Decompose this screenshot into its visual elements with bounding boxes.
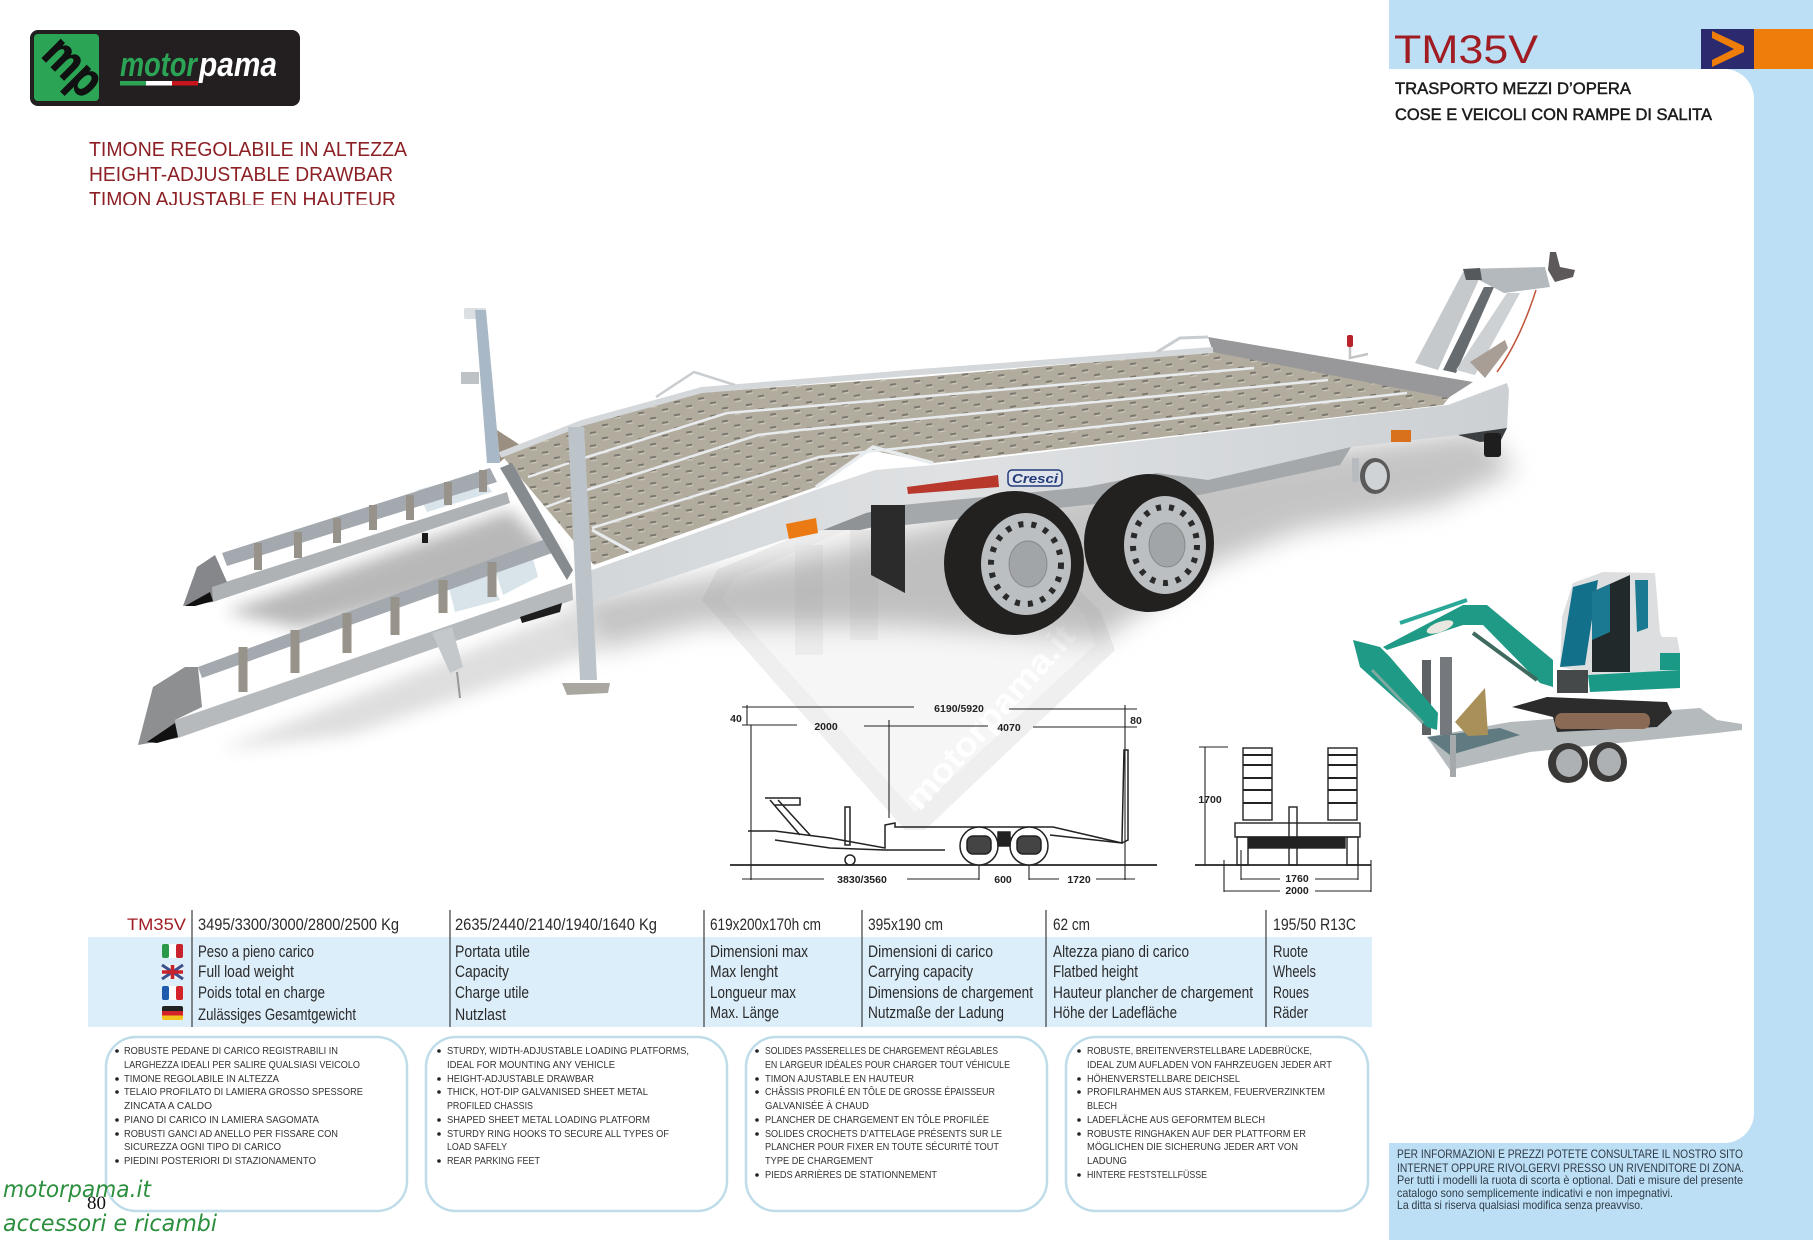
side view dimensions: 40 [730,713,742,725]
side view dimensions [730,703,1142,886]
panel: Italian features: SICUREZZA OGNI TIPO DI CARICO [124,1141,281,1153]
column: carrying capacity: Nutzmaße der Ladung [868,1003,1004,1022]
column: max length: Dimensioni max [710,942,808,961]
trailer ground shadows [220,430,1515,750]
side view dimensions: 600 [994,874,1012,886]
chassis side member [577,383,1509,608]
column: carrying capacity: Carrying capacity [868,962,973,981]
front wall [1208,337,1473,398]
column: capacity: Nutzlast [455,1005,506,1024]
rear view dimensions: 1760 [1285,873,1309,885]
brand plates [907,470,1062,494]
column: capacity: Charge utile [455,983,529,1002]
column: full load weight [198,915,399,1024]
panel: English features: REAR PARKING FEET [447,1155,540,1167]
column: max length: 619x200x170h cm [710,915,821,934]
drawbar feature heading [89,142,407,205]
column: wheels: Wheels [1273,962,1316,981]
panel: German features: IDEAL ZUM AUFLADEN VON FAHRZEUGEN JEDER ART [1087,1059,1333,1071]
boom and arm [1353,600,1553,730]
column: capacity: Portata utile [455,942,530,961]
panel: English features: STURDY RING HOOKS TO SECURE ALL TYPES OF [447,1128,669,1140]
brand plates: Cresci [1012,471,1058,486]
right blue sidebar [1389,0,1813,1240]
footer information note: PER INFORMAZIONI E PREZZI POTETE CONSULTARE IL NOSTRO SITO [1397,1147,1743,1161]
column: carrying capacity [868,915,1033,1022]
background watermark: motorpama.it [898,617,1083,817]
panel: Italian features: PIANO DI CARICO IN LAMIERA SAGOMATA [124,1114,319,1126]
cab [1557,572,1680,693]
panel: French features: GALVANISÉE À CHAUD [765,1099,869,1112]
language flags [162,944,183,1020]
mudflap [871,505,905,593]
column: wheels: Räder [1273,1003,1308,1022]
deck ribs and rails [500,337,1407,552]
logo: motorpama: motor [120,46,198,84]
column: flatbed height [1053,915,1253,1022]
subtitle: COSE E VEICOLI CON RAMPE DI SALITA [1395,106,1712,124]
arrow tab icon [1701,29,1813,69]
rear view dimensions: 2000 [1285,885,1309,897]
jockey wheel and parking foot [1352,433,1501,494]
panel: French features: TIMON AJUSTABLE EN HAUTEUR [765,1073,914,1085]
model title: TM35V [1394,28,1538,72]
logo: motorpama: mp [32,24,116,108]
column: full load weight: 3495/3300/3000/2800/2500 Kg [198,915,399,934]
panel: German features [1066,1037,1368,1211]
panel: French features: SOLIDES CROCHETS D’ATTELAGE PRÉSENTS SUR LE [765,1127,1002,1140]
panel: French features: PIEDS ARRIÈRES DE STATIONNEMENT [765,1168,938,1181]
side view dimensions: 6190/5920 [934,703,984,715]
lower loading ramp [138,540,573,745]
panel: Italian features: TELAIO PROFILATO DI LAMIERA GROSSO SPESSORE [124,1086,363,1098]
rear view dimensions [1198,747,1371,897]
small trailer [1422,657,1742,783]
drawbar feature heading: TIMON AJUSTABLE EN HAUTEUR [89,189,396,211]
logo: motorpama [30,24,300,108]
column: flatbed height: Höhe der Ladefläche [1053,1003,1177,1022]
panel: Italian features: ZINCATA A CALDO [124,1100,212,1112]
footer information note: La ditta si riserva qualsiasi modifica senza preavviso. [1397,1198,1643,1212]
footer information note: catalogo sono semplicemente indicativi e non impegnativi. [1397,1186,1673,1200]
rear view trailer outline [1195,748,1371,865]
panel: English features: IDEAL FOR MOUNTING ANY VEHICLE [447,1059,615,1071]
panel: French features: PLANCHER POUR FIXER EN TOUTE SÉCURITÉ TOUT [765,1140,1000,1153]
panel: English features [426,1037,727,1211]
column: flatbed height: Hauteur plancher de chargement [1053,983,1253,1002]
model code: TM35V [127,915,187,934]
column: capacity [455,915,657,1024]
panel: French features: EN LARGEUR IDÉALES POUR CHARGER TOUT VÉHICULE [765,1058,1010,1071]
column: max length: Longueur max [710,983,796,1002]
excavator on trailer photo [1353,572,1742,783]
side view trailer outline [730,750,1157,865]
panel: Italian features: LARGHEZZA IDEALI PER SALIRE QUALSIASI VEICOLO [124,1059,360,1071]
panel: German features: HÖHENVERSTELLBARE DEICHSEL [1087,1073,1240,1085]
logo: motorpama: pama [198,46,277,84]
page number: 80 [87,1193,106,1214]
panel: English features: LOAD SAFELY [447,1141,507,1153]
background watermark [702,480,1115,830]
specification table [88,910,1372,1027]
panel: German features: ROBUSTE, BREITENVERSTELLBARE LADEBRÜCKE, [1087,1045,1312,1057]
panel: German features: LADUNG [1087,1155,1127,1167]
column: max length: Max lenght [710,962,778,981]
column: full load weight: Peso a pieno carico [198,942,314,961]
panel: Italian features: ROBUSTI GANCI AD ANELLO PER FISSARE CON [124,1128,338,1140]
column: wheels: Roues [1273,983,1309,1002]
column: full load weight: Poids total en charge [198,983,325,1002]
vertical marker pole [461,308,520,463]
drawbar feature heading: HEIGHT-ADJUSTABLE DRAWBAR [89,164,393,186]
column: max length [710,915,821,1022]
bucket [1455,688,1488,736]
panel: German features: HINTERE FESTSTELLFÜSSE [1087,1169,1207,1181]
reflectors [786,430,1411,539]
panel: German features: BLECH [1087,1100,1117,1112]
website watermark: accessori e ricambi [3,1211,218,1237]
column: carrying capacity: 395x190 cm [868,915,943,934]
technical drawing: rear view [1195,747,1371,897]
main photo: car trailer with ramps [138,252,1575,750]
panel: German features: PROFILRAHMEN AUS STARKEM, FEUERVERZINKTEM [1087,1086,1325,1098]
side view dimensions: 80 [1130,715,1142,727]
drawbar feature heading: TIMONE REGOLABILE IN ALTEZZA [89,139,408,161]
column: capacity: 2635/2440/2140/1940/1640 Kg [455,915,657,934]
panel: French features: PLANCHER DE CHARGEMENT EN TÔLE PROFILÉE [765,1113,989,1126]
panel: German features: ROBUSTE RINGHAKEN AUF DER PLATTFORM ER [1087,1128,1306,1140]
footer information note: INTERNET OPPURE RIVOLGERVI PRESSO UN RIVENDITORE DI ZONA. [1397,1161,1744,1175]
panel: Italian features: ROBUSTE PEDANE DI CARICO REGISTRABILI IN [124,1045,338,1057]
rear support leg [562,427,610,695]
column: flatbed height: Flatbed height [1053,962,1138,981]
side view dimensions: 2000 [814,721,838,733]
column: wheels [1273,915,1356,1022]
column: full load weight: Zulässiges Gesamtgewicht [198,1005,356,1024]
side view dimensions: 1720 [1067,874,1091,886]
subtitle: TRASPORTO MEZZI D’OPERA [1395,80,1631,98]
column: wheels: Ruote [1273,942,1308,961]
panel: French features: SOLIDES PASSERELLES DE CHARGEMENT RÉGLABLES [765,1044,998,1057]
panel: English features: SHAPED SHEET METAL LOADING PLATFORM [447,1114,650,1126]
side view dimensions: 3830/3560 [837,874,887,886]
website watermark: motorpama.it [3,1177,152,1203]
red crank handle [1347,335,1368,358]
panel: French features: CHÂSSIS PROFILÉ EN TÔLE DE GROSSE ÉPAISSEUR [765,1085,995,1098]
panel: Italian features: TIMONE REGOLABILE IN ALTEZZA [124,1073,279,1085]
drawbar and coupling [1415,252,1575,378]
ramp hinge [500,463,573,580]
panel: English features: STURDY, WIDTH-ADJUSTABLE LOADING PLATFORMS, [447,1045,689,1057]
column: flatbed height: 62 cm [1053,915,1090,934]
twin axle wheels [944,474,1214,635]
column dividers [192,910,1266,1027]
tracks [1512,697,1672,732]
column: carrying capacity: Dimensioni di carico [868,942,993,961]
panel: Italian features [106,1037,407,1211]
column: full load weight: Full load weight [198,962,294,981]
panel: English features: PROFILED CHASSIS [447,1100,533,1112]
column: carrying capacity: Dimensions de chargement [868,983,1033,1002]
loading deck surface [503,352,1458,565]
panel: French features [746,1037,1047,1211]
website watermark [3,1177,218,1237]
footer information note: Per tutti i modelli la ruota di scorta è optional. Dati e misure del presente [1397,1173,1743,1187]
panel: English features: THICK, HOT-DIP GALVANISED SHEET METAL [447,1086,648,1098]
rear view dimensions: 1700 [1198,794,1222,806]
column: capacity: Capacity [455,962,509,981]
column: wheels: 195/50 R13C [1273,915,1356,934]
panel: French features: TYPE DE CHARGEMENT [765,1155,874,1167]
footer information note [1397,1147,1744,1212]
upper loading ramp [183,468,510,606]
side view dimensions: 4070 [997,722,1021,734]
subtitle [1395,80,1712,124]
table band [88,937,1372,1027]
column: flatbed height: Altezza piano di carico [1053,942,1189,961]
panel: German features: MÖGLICHEN DIE SICHERUNG JEDER ART VON [1087,1141,1298,1153]
panel: German features: LADEFLÄCHE AUS GEFORMTEM BLECH [1087,1114,1265,1126]
panel: English features: HEIGHT-ADJUSTABLE DRAWBAR [447,1073,594,1085]
panel: Italian features: PIEDINI POSTERIORI DI STAZIONAMENTO [124,1155,316,1167]
column: max length: Max. Länge [710,1003,779,1022]
technical drawing: side view [730,703,1157,886]
